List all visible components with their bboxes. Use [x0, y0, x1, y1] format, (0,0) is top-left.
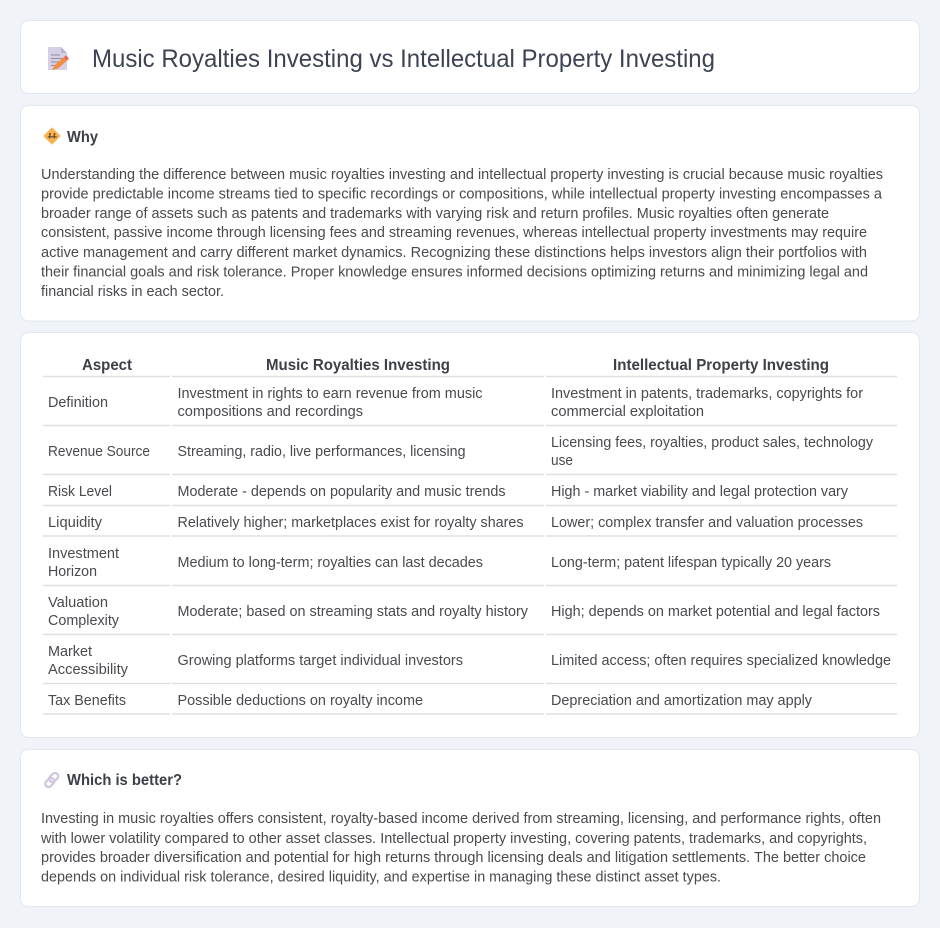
table row: market accessibility: Market — [48, 644, 92, 660]
table row: revenue source — [48, 435, 874, 469]
text block: which is better paragraph: depends on individual risk tolerance, desired liquidity, and expertise in managing these distinct asset types. — [41, 870, 721, 886]
table row: investment horizon: Medium to long-term; royalties can last decades — [178, 555, 483, 571]
table row: definition — [48, 386, 863, 420]
table header row — [82, 357, 829, 374]
heading: why: Why — [67, 129, 98, 146]
table row: risk level: High - market viability and legal protection vary — [551, 484, 849, 500]
text block: why paragraph — [41, 167, 883, 300]
panel: comparison table — [20, 332, 920, 738]
text block: which is better paragraph: provides broader diversification and potential for high returns through licensing deals and litigation settlements. The better choice — [41, 850, 866, 866]
text block: which is better paragraph — [40, 811, 881, 886]
table row: valuation complexity — [48, 595, 880, 629]
table row: definition: commercial exploitation — [551, 404, 704, 420]
table row: risk level: Moderate - depends on popularity and music trends — [178, 484, 506, 500]
table row: risk level: Risk Level — [48, 484, 112, 500]
table row: valuation complexity: Complexity — [48, 613, 120, 629]
table row: tax benefits: Possible deductions on royalty income — [178, 693, 423, 709]
text block: why paragraph: financial risks in each sector. — [41, 284, 224, 300]
table row: valuation complexity: Valuation — [48, 595, 108, 611]
table row: market accessibility: Accessibility — [48, 662, 129, 678]
text block: why paragraph: provide predictable income streams tied to specific recordings or compositions, while intellectual property investing encompasses a — [41, 186, 882, 202]
text block: which is better paragraph: with lower volatility compared to other asset classes. Intellectual property investing, covering patents, trademarks, and copyrights, — [40, 831, 867, 847]
text block: why paragraph: Understanding the difference between music royalties investing and intellectual property investing is crucial because music royalties — [41, 167, 883, 183]
icon: chain link — [44, 772, 60, 788]
icon: document with pencil — [48, 47, 69, 70]
table row: risk level — [48, 484, 849, 500]
table row: liquidity: Lower; complex transfer and valuation processes — [551, 515, 863, 531]
table header row: Music Royalties Investing — [266, 357, 450, 374]
table row: revenue source: Streaming, radio, live performances, licensing — [178, 444, 466, 460]
text block: why paragraph: broader range of assets such as patents and trademarks with varying risk and return profiles. Music royalties often generate — [41, 206, 829, 222]
icon: warning diamond — [44, 128, 60, 144]
table row: market accessibility: Growing platforms target individual investors — [178, 653, 463, 669]
table row: investment horizon: Investment — [48, 546, 119, 562]
table header row: Aspect — [82, 357, 133, 374]
table row: investment horizon: Horizon — [48, 564, 97, 580]
table row: definition: Definition — [48, 395, 108, 411]
table row: market accessibility: Limited access; often requires specialized knowledge — [551, 653, 891, 669]
table header row: Intellectual Property Investing — [613, 357, 829, 374]
table row: tax benefits: Depreciation and amortization may apply — [551, 693, 813, 709]
text block: why paragraph: consistent, passive income through licensing fees and streaming revenues, whereas intellectual property investments may require — [41, 225, 867, 241]
table row: tax benefits: Tax Benefits — [48, 693, 126, 709]
text block: which is better paragraph: Investing in music royalties offers consistent, royalty-based income derived from streaming, licensing, and performance rights, often — [41, 811, 881, 827]
table row: investment horizon — [48, 546, 831, 580]
table row: revenue source: Revenue Source — [48, 444, 150, 460]
table row: liquidity: Relatively higher; marketplaces exist for royalty shares — [178, 515, 524, 531]
title: Music Royalties Investing vs Intellectual Property Investing — [92, 45, 715, 73]
heading: which is better: Which is better? — [67, 772, 182, 789]
table row: tax benefits — [48, 693, 813, 709]
table row: revenue source: use — [551, 453, 573, 469]
table row: liquidity: Liquidity — [48, 515, 103, 531]
table row: definition: Investment in patents, trademarks, copyrights for — [551, 386, 863, 402]
panel: why — [20, 106, 920, 321]
table row: market accessibility — [48, 644, 891, 678]
table row: liquidity — [48, 515, 863, 531]
table row: valuation complexity: Moderate; based on streaming stats and royalty history — [178, 604, 529, 620]
table row: valuation complexity: High; depends on market potential and legal factors — [551, 604, 880, 620]
table row: revenue source: Licensing fees, royalties, product sales, technology — [551, 435, 874, 451]
panel: title header — [20, 20, 920, 94]
text block: why paragraph: active management and carry different market dynamics. Recognizing these distinctions helps investors align their portfolios with — [41, 245, 867, 261]
table row: investment horizon: Long-term; patent lifespan typically 20 years — [551, 555, 831, 571]
panel: which is better — [20, 750, 920, 906]
table row: definition: compositions and recordings — [178, 404, 363, 420]
text block: why paragraph: their financial goals and risk tolerance. Proper knowledge ensures informed decisions optimizing returns and minimizing legal and — [41, 264, 868, 280]
table row: definition: Investment in rights to earn revenue from music — [178, 386, 482, 402]
